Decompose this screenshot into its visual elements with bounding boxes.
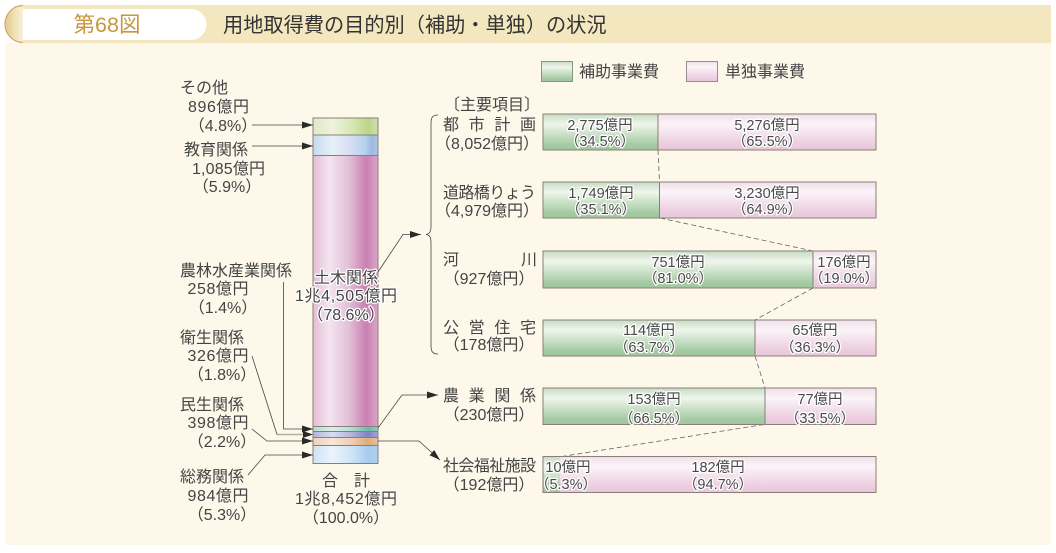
row label: rivers: 川 [521, 252, 537, 269]
legend [542, 62, 805, 82]
bar: rivers: 751億円 [651, 254, 705, 271]
bar: rivers [543, 251, 879, 288]
label: agriculture: （1.4%） [189, 299, 257, 317]
arrows: left labels to column [248, 125, 313, 475]
bar: city planning: （65.5%） [732, 133, 802, 150]
bar: rivers: （19.0%） [809, 270, 879, 287]
bar: rivers: 176億円 [817, 254, 871, 271]
bar: city planning: 5,276億円 [734, 117, 800, 134]
row label: public housing: 公営住宅 [443, 319, 536, 337]
legend: independent [686, 62, 718, 82]
row label: city planning: 都市計画 [443, 116, 536, 134]
segment: agriculture [313, 426, 378, 432]
label: agriculture: 258億円 [188, 280, 248, 298]
bar: welfare facilities [535, 456, 876, 493]
row label: roads: （4,979億円） [435, 202, 539, 220]
row label: public housing: （178億円） [444, 336, 534, 354]
bar: agriculture [543, 388, 876, 427]
column total label: 1兆8,452億円 [295, 490, 397, 508]
bar: public housing [543, 320, 876, 356]
label: welfare [180, 396, 256, 451]
bar: city planning: （34.5%） [565, 133, 635, 150]
figure number pill [23, 9, 206, 40]
row label: welfare facilities: （192億円） [444, 476, 534, 494]
legend: 補助事業費 [579, 63, 659, 81]
segment: sanitation [313, 432, 378, 438]
label: welfare: 民生関係 [180, 396, 244, 414]
bar: agriculture: 77億円 [797, 391, 843, 408]
label: education: 1,085億円 [192, 160, 265, 178]
bar: public housing: （36.3%） [780, 339, 850, 356]
legend: subsidized [542, 62, 572, 82]
row label: agriculture: 農業関係 [443, 387, 536, 405]
label: general affairs: （5.3%） [188, 506, 256, 524]
column centre label [295, 269, 397, 324]
label: sanitation [180, 329, 256, 384]
bar: roads: （64.9%） [732, 201, 802, 218]
bar: public housing: 114億円 [623, 322, 675, 339]
row label: rivers [443, 251, 537, 288]
row label: rivers: （927億円） [444, 270, 534, 288]
legend: 単独事業費 [725, 63, 805, 81]
label: education [184, 141, 265, 196]
label: general affairs: 総務関係 [180, 468, 244, 486]
bar: agriculture: （33.5%） [785, 410, 855, 427]
label: agriculture [180, 262, 292, 317]
bar: roads: 3,230億円 [734, 185, 800, 202]
label: other: 896億円 [188, 98, 249, 116]
row label: welfare facilities [443, 457, 536, 494]
row label: public housing [443, 319, 536, 354]
bar: roads: 1,749億円 [568, 185, 634, 202]
label: education: 教育関係 [184, 141, 248, 159]
row label: city planning [435, 116, 539, 153]
heading: main items: 〔主要項目〕 [444, 96, 540, 114]
header band [5, 5, 1051, 43]
label: agriculture: 農林水産業関係 [180, 262, 292, 280]
brace [426, 115, 438, 354]
segment: general affairs [313, 446, 378, 464]
header end cap [5, 6, 23, 42]
row label: welfare facilities: 社会福祉施設 [443, 457, 536, 475]
bar: city planning: 2,775億円 [567, 117, 633, 134]
figure number: 第68図 [74, 13, 140, 37]
label: education: （5.9%） [193, 178, 261, 196]
column total label: 合 計 [322, 472, 370, 490]
label: general affairs: 984億円 [188, 487, 248, 505]
column total label: （100.0%） [303, 509, 389, 527]
bar: rivers: （81.0%） [643, 270, 713, 287]
label: general affairs [180, 468, 256, 524]
bar: welfare facilities: （94.7%） [683, 476, 753, 493]
row label: roads [435, 184, 539, 220]
segment: education [313, 135, 378, 156]
label: sanitation: 326億円 [188, 347, 248, 365]
label: other: その他 [180, 79, 228, 97]
bar: roads [543, 182, 876, 218]
bar: agriculture: （66.5%） [619, 410, 689, 427]
bar: welfare facilities: 182億円 [691, 459, 745, 476]
row label: city planning: （8,052億円） [435, 135, 539, 153]
label: welfare: （2.2%） [188, 433, 256, 451]
label: other [180, 79, 257, 135]
arrows: column to right items [378, 234, 440, 460]
row label: rivers: 河 [443, 251, 459, 269]
row label: agriculture: （230億円） [444, 406, 534, 424]
row label: agriculture [443, 387, 536, 424]
segment: welfare [313, 438, 378, 446]
label: sanitation: 衛生関係 [180, 329, 244, 347]
segment: other [313, 118, 378, 135]
title: 用地取得費の目的別（補助・単独）の状況 [223, 14, 607, 37]
column centre label: 土木関係 [314, 269, 378, 287]
bar: agriculture: 153億円 [627, 391, 681, 408]
column total label [295, 472, 397, 527]
bar: welfare facilities: （5.3%） [535, 476, 597, 493]
bar: city planning [543, 114, 876, 150]
stacked column [313, 118, 378, 464]
label: sanitation: （1.8%） [188, 366, 256, 384]
segment: civil engineering [313, 156, 378, 426]
bar: roads: （35.1%） [566, 201, 636, 218]
bar: public housing: （63.7%） [614, 339, 684, 356]
label: other: （4.8%） [189, 117, 257, 135]
row label: roads: 道路橋りょう [443, 184, 536, 202]
dashed connectors [562, 150, 813, 456]
bar: public housing: 65億円 [792, 322, 838, 339]
column centre label: 1兆4,505億円 [295, 287, 397, 305]
column centre label: （78.6%） [307, 306, 385, 324]
label: welfare: 398億円 [188, 414, 248, 432]
bar: welfare facilities: 10億円 [545, 459, 591, 476]
